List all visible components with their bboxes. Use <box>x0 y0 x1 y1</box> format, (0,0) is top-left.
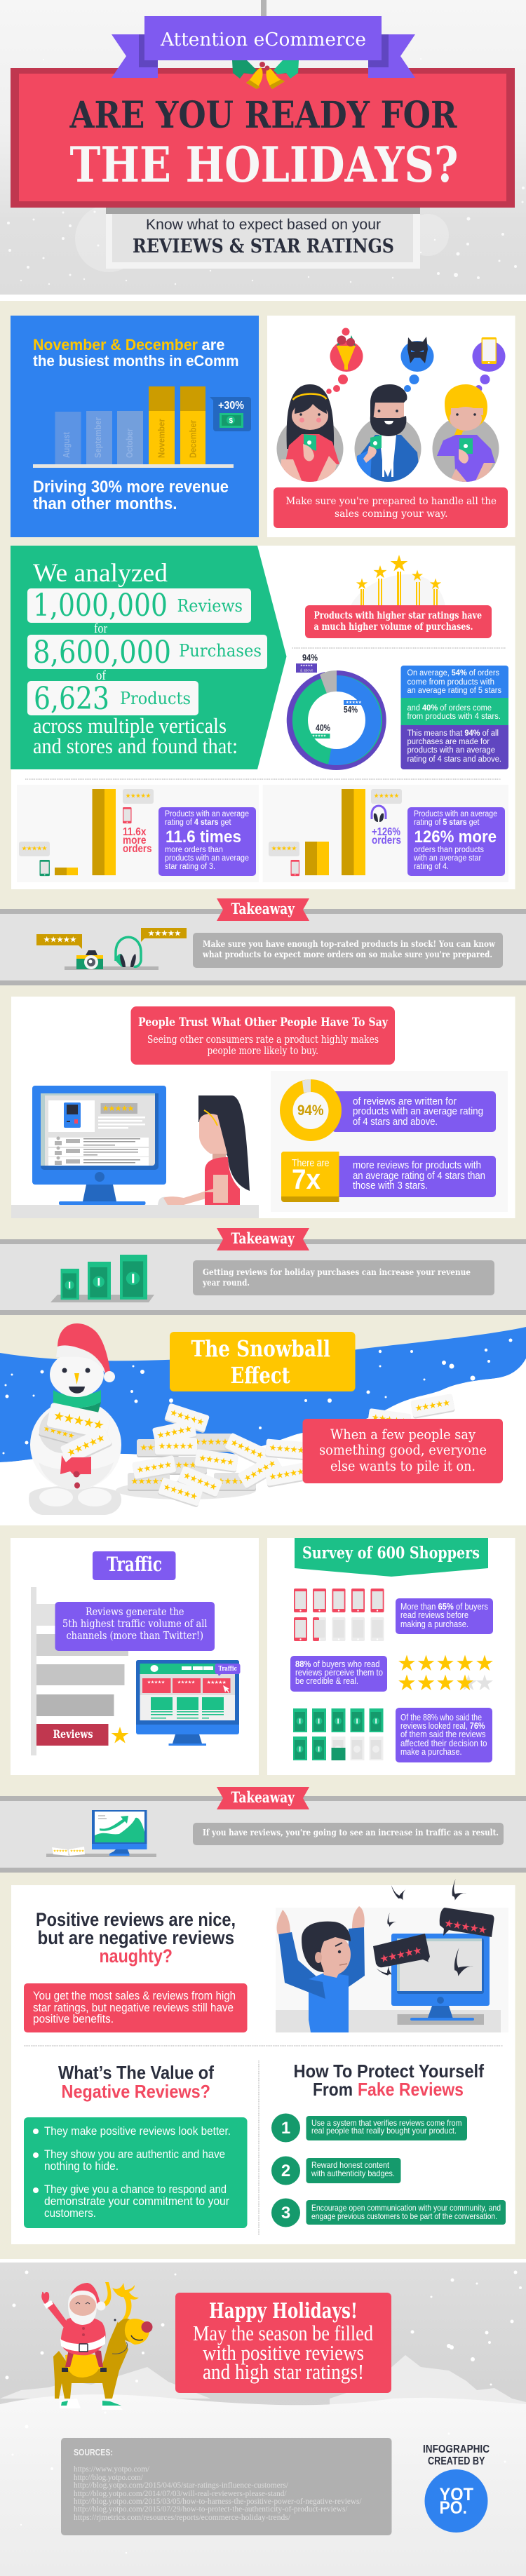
green arrow panel: 8,600,000 <box>33 635 171 670</box>
green arrow panel: 6,623 <box>34 681 109 717</box>
icon: money 76% <box>293 1708 383 1760</box>
illustration: blonde woman <box>432 384 499 484</box>
text: 65%: making a purchase. <box>400 1619 468 1629</box>
heading <box>33 336 238 370</box>
bar chart: September <box>93 417 103 458</box>
title panel <box>11 68 515 208</box>
chart: 11.6x more orders: star rating of 3. <box>165 863 215 871</box>
callout: positive benefits: positive benefits. <box>33 2012 114 2025</box>
bar chart: traffic channels <box>31 1587 128 1755</box>
sources box: http://blog.yotpo.com/2015/04/05/star-ratings-influence-customers/ <box>74 2480 289 2490</box>
chart: +126% orders: orders than products <box>414 846 484 854</box>
stat: 7x: those with 3 stars. <box>353 1180 428 1192</box>
stat: 7x: 7x <box>292 1164 321 1195</box>
block: value of negative reviews: They show you are authentic and have <box>44 2147 225 2161</box>
callout: higher volume <box>305 605 492 638</box>
donut legend text: and 40% of orders come <box>407 704 492 713</box>
chart: 11.6x more orders: more orders than <box>165 846 223 854</box>
ribbon: Attention eCommerce <box>112 16 415 78</box>
heading: survey of 600 shoppers <box>295 1538 488 1577</box>
donut legend text: purchases are made for <box>407 738 490 746</box>
greeting box: with positive reviews <box>203 2340 364 2365</box>
donut chart: 54% <box>344 704 358 715</box>
sources box: http://blog.yotpo.com/ <box>74 2472 144 2482</box>
text: takeaway message: year round. <box>202 1277 250 1288</box>
donut legend text: rating of 4 stars and above. <box>407 755 501 764</box>
step 1: real people that really bought your product. <box>311 2126 457 2136</box>
bats <box>377 1879 478 1981</box>
callout: positive benefits: You get the most sales & reviews from high <box>33 1989 236 2002</box>
panel: busiest months <box>11 316 259 537</box>
ribbon: takeaway: Takeaway <box>231 900 295 917</box>
text: 65%: read reviews before <box>400 1610 468 1620</box>
block: protect from fake reviews: From <box>313 2079 353 2100</box>
step 3: 3 <box>281 2204 290 2223</box>
text: 88%: be credible & real. <box>295 1676 358 1686</box>
illustration: man with bad reviews <box>276 1879 508 2032</box>
callout: pile it on: else wants to pile it on. <box>330 1457 476 1474</box>
stat: 94% <box>280 1079 496 1141</box>
takeaway band 1 <box>0 898 526 985</box>
panel: negative reviews <box>11 1879 515 2244</box>
callout: be prepared <box>274 487 508 528</box>
heading: are <box>202 336 224 353</box>
illustration: snowman <box>29 1323 121 1515</box>
panel: analysis <box>11 546 515 889</box>
stat: 7x: an average rating of 4 stars than <box>353 1170 485 1182</box>
heading: naughty: naughty? <box>100 1946 173 1967</box>
block: protect from fake reviews: Fake Reviews <box>358 2079 464 2100</box>
icon: phones 65% <box>294 1589 384 1641</box>
donut legend text: an average rating of 5 stars <box>407 687 501 695</box>
chart: 11.6x more orders: Products with an average <box>165 810 249 818</box>
block: protect from fake reviews <box>271 2061 506 2227</box>
heading: traffic <box>93 1551 175 1580</box>
credit: Yotpo logo: INFOGRAPHIC <box>423 2443 490 2455</box>
panel: survey <box>267 1538 515 1775</box>
callout: higher volume: Products with higher star ratings have <box>314 610 482 621</box>
sources box: http://blog.yotpo.com/2014/07/03/will-real-reviewers-please-stand/ <box>74 2488 287 2498</box>
chart: 11.6x more orders: orders <box>123 843 151 855</box>
text: 65% <box>396 1598 493 1634</box>
bar chart <box>33 386 234 468</box>
donut chart: 94% <box>302 652 318 663</box>
bar chart: October <box>124 429 135 458</box>
thought: bouquet <box>326 328 363 394</box>
ribbon: takeaway: Takeaway <box>231 1229 295 1247</box>
hanging rope <box>261 0 267 17</box>
stats panel <box>271 1071 508 1212</box>
heading: the snowball effect: Effect <box>230 1362 290 1389</box>
step 3 <box>271 2198 506 2227</box>
panel: traffic <box>11 1538 259 1775</box>
icon: monitor with traffic <box>136 1660 240 1746</box>
icon: monitor with rising graph <box>46 1810 156 1857</box>
thought: phone <box>469 337 505 394</box>
green arrow panel: Purchases <box>179 641 262 661</box>
block: protect from fake reviews: How To Protect Yourself <box>293 2061 484 2082</box>
donut legend text: come from products with <box>407 678 494 687</box>
callout: positive benefits: star ratings, but negative reviews still have <box>33 2001 234 2014</box>
illustration: bearded man <box>355 384 421 484</box>
credit: Yotpo logo: CREATED BY <box>428 2455 485 2467</box>
chart: 11.6x more orders: more <box>123 835 147 847</box>
chart: +126% orders: with an average star <box>413 854 481 863</box>
donut legend text: products with an average <box>407 746 495 755</box>
chart: 11.6x more orders: 11.6x <box>123 826 147 838</box>
bar chart: August <box>61 431 72 458</box>
text: driving revenue: than other months. <box>33 494 177 513</box>
step 2: 2 <box>281 2162 290 2180</box>
step 3: Encourage open communication with your community, and <box>311 2203 501 2213</box>
chart: +126% orders: Products with an average <box>414 810 497 818</box>
green arrow panel: and stores and found that: <box>33 734 238 758</box>
heading: naughty <box>36 1909 236 1967</box>
donut chart <box>287 652 386 770</box>
heading: the snowball effect <box>170 1332 355 1391</box>
heading: the busiest months in eComm <box>33 352 238 370</box>
callout: pile it on: When a few people say <box>330 1426 476 1443</box>
callout: higher volume: a much higher volume of purchases. <box>314 621 473 633</box>
chart: +126% orders: rating of 4. <box>414 863 449 871</box>
callout: 5th highest traffic: 5th highest traffic volume of all <box>62 1619 208 1630</box>
callout: positive benefits <box>24 1983 247 2032</box>
heading box: Seeing other consumers rate a product highly makes <box>147 1034 379 1046</box>
chart: 11.6x more orders: rating of 4 stars get <box>165 818 231 827</box>
chart: +126% orders: 126% more <box>414 828 497 847</box>
icon: rising stars <box>351 555 445 606</box>
ribbon: Attention eCommerce: Attention eCommerce <box>160 29 366 50</box>
donut chart: & above <box>300 669 313 673</box>
chart: +126% orders <box>262 785 508 882</box>
heading: the snowball effect: The Snowball <box>191 1335 330 1362</box>
credit: Yotpo logo: PO. <box>439 2498 467 2518</box>
subtitle box <box>106 208 420 269</box>
sources box <box>61 2438 391 2535</box>
heading: naughty: Positive reviews are nice, <box>36 1909 236 1930</box>
green arrow panel: 1,000,000 <box>33 588 168 623</box>
callout: +30% <box>210 397 251 431</box>
footer section <box>0 2259 526 2576</box>
heading box: people more likely to buy. <box>208 1046 318 1057</box>
heading: naughty: but are negative reviews <box>38 1927 234 1948</box>
greeting box: May the season be filled <box>193 2321 373 2345</box>
illustration: woman at computer <box>11 1086 259 1218</box>
bubble: negative ratings right <box>440 1908 494 1937</box>
stat: 94%: of reviews are written for <box>353 1095 457 1107</box>
illustration: woman with dark hair <box>276 384 344 485</box>
ribbon: takeaway: Takeaway <box>231 1788 295 1806</box>
stat: 7x <box>281 1152 496 1202</box>
panel: shoppers <box>267 316 515 537</box>
chart: +126% orders: +126% <box>372 826 400 838</box>
text: 76% <box>396 1708 492 1762</box>
takeaway band 2 <box>0 1228 526 1315</box>
block: value of negative reviews: customers. <box>44 2206 96 2220</box>
ribbon: takeaway <box>217 1787 309 1809</box>
step 2: Reward honest content <box>311 2160 390 2170</box>
ribbon: takeaway <box>217 898 309 921</box>
block: value of negative reviews <box>24 2062 247 2228</box>
chart: +126% orders: rating of 5 stars get <box>414 818 480 827</box>
text: 76%: of them said the reviews <box>400 1729 485 1739</box>
text: 65%: More than 65% of buyers <box>400 1602 488 1612</box>
step 3: engage previous customers to be part of the conversation. <box>311 2211 497 2221</box>
bubble: negative ratings left <box>373 1934 430 1967</box>
heading: traffic: Traffic <box>107 1553 162 1576</box>
title panel: ARE YOU READY FOR <box>69 94 457 137</box>
block: value of negative reviews: nothing to hide. <box>44 2159 119 2173</box>
sources box: http://blog.yotpo.com/2015/07/29/how-to-protect-the-authenticity-of-product-reviews/ <box>74 2504 348 2514</box>
text: takeaway message: Getting reviews for holiday purchases can increase your revenue <box>203 1267 471 1277</box>
icon: stars 88% <box>398 1655 493 1690</box>
callout: +30%: $ <box>229 417 233 425</box>
donut legend text <box>401 666 508 769</box>
text: 88%: 88% of buyers who read <box>295 1659 380 1669</box>
callout: pile it on: something good, everyone <box>319 1441 487 1458</box>
step 1: 1 <box>281 2119 290 2138</box>
callout: pile it on <box>303 1419 503 1483</box>
credit: Yotpo logo <box>423 2443 490 2533</box>
step 2: with authenticity badges. <box>311 2169 395 2178</box>
subtitle box: REVIEWS & STAR RATINGS <box>133 236 394 257</box>
stat: 94%: of 4 stars and above. <box>353 1116 438 1128</box>
block: value of negative reviews: What’s The Value of <box>58 2062 214 2083</box>
greeting box: Happy Holidays! <box>209 2299 358 2324</box>
green arrow panel: across multiple verticals <box>33 713 227 738</box>
illustration: pile of review cards <box>116 1394 455 1508</box>
donut legend text: This means that 94% of all <box>407 729 499 738</box>
callout: be prepared: Make sure you're prepared to handle all the <box>286 496 497 507</box>
sources box: http://blog.yotpo.com/2015/03/05/how-to-harness-the-positive-power-of-negative-reviews/ <box>74 2496 362 2506</box>
greeting box <box>175 2293 391 2393</box>
donut legend text: On average, 54% of orders <box>407 669 499 677</box>
icon: camera and headphones with ratings <box>36 928 187 970</box>
callout: 5th highest traffic <box>55 1602 215 1651</box>
ribbon: takeaway <box>217 1228 309 1250</box>
block: value of negative reviews: demonstrate your commitment to your <box>44 2194 229 2208</box>
thought: mask <box>398 337 433 394</box>
green arrow panel: for <box>94 621 108 636</box>
icon: growing money stacks <box>50 1255 154 1302</box>
callout: 5th highest traffic: Reviews generate the <box>86 1607 184 1618</box>
heading: survey of 600 shoppers: Survey of 600 Shoppers <box>302 1544 480 1563</box>
bar chart: November <box>156 419 167 458</box>
text: driving revenue <box>33 478 229 513</box>
chart: 11.6x more orders <box>17 785 259 882</box>
takeaway band 3 <box>0 1787 526 1873</box>
bar chart: December <box>188 420 198 458</box>
stat: 7x: There are <box>292 1157 330 1169</box>
callout: +30%: +30% <box>218 400 244 412</box>
illustration: santa on reindeer <box>41 2282 152 2410</box>
heading: November & December <box>33 336 198 353</box>
bar chart: traffic channels: Reviews <box>53 1727 93 1741</box>
section: snowball effect <box>0 1323 526 1525</box>
donut chart: 40% <box>316 722 330 733</box>
green arrow panel: of <box>96 668 107 683</box>
chart: 11.6x more orders: 11.6 times <box>166 828 241 847</box>
greeting box: and high star ratings! <box>203 2359 364 2384</box>
green arrow panel: Reviews <box>177 596 243 616</box>
text: takeaway message <box>193 933 503 968</box>
heading box <box>130 1006 395 1065</box>
callout: 5th highest traffic: channels (more than Twitter!) <box>66 1631 203 1642</box>
block: value of negative reviews: Negative Reviews? <box>62 2081 210 2102</box>
block: value of negative reviews: They give you a chance to respond and <box>44 2183 227 2196</box>
step 1 <box>271 2114 467 2142</box>
step 1: Use a system that verifies reviews come from <box>311 2118 461 2128</box>
stat: 94%: 94% <box>297 1102 324 1119</box>
heading box: People Trust What Other People Have To Say <box>138 1016 388 1029</box>
text: takeaway message <box>193 1823 504 1845</box>
step 2 <box>271 2156 401 2185</box>
text: 76%: Of the 88% who said the <box>400 1713 482 1722</box>
text: driving revenue: Driving 30% more revenue <box>33 478 229 497</box>
text: 88%: reviews perceive them to <box>295 1668 383 1678</box>
text: 76%: affected their decision to <box>400 1739 487 1748</box>
header section <box>0 0 526 301</box>
sources box: SOURCES: <box>74 2447 113 2457</box>
text: 88% <box>290 1656 387 1692</box>
text: 76%: make a purchase. <box>400 1747 461 1757</box>
text: takeaway message <box>193 1260 494 1295</box>
green arrow panel: We analyzed <box>33 559 168 588</box>
stat: 7x: more reviews for products with <box>353 1159 481 1171</box>
chart: 11.6x more orders: products with an average <box>165 854 249 863</box>
title panel: THE HOLIDAYS? <box>70 137 459 194</box>
subtitle box: Know what to expect based on your <box>146 217 381 233</box>
icon: monitor with traffic: Traffic <box>219 1665 237 1673</box>
block: value of negative reviews: They make positive reviews look better. <box>44 2124 231 2138</box>
chart: +126% orders: orders <box>372 835 401 847</box>
stat: 94%: products with an average rating <box>353 1105 483 1117</box>
callout: be prepared: sales coming your way. <box>335 508 447 520</box>
sources box: https://www.yotpo.com/ <box>74 2464 150 2474</box>
green arrow panel <box>11 546 286 769</box>
sources box: https://rjmetrics.com/resources/reports/ecommerce-holiday-trends/ <box>74 2512 291 2522</box>
donut legend text: from products with 4 stars. <box>407 713 501 721</box>
green arrow panel: Products <box>120 689 191 708</box>
icon: holly and bells <box>232 60 299 89</box>
text: 76%: reviews looked real, 76% <box>400 1721 485 1731</box>
panel: people trust <box>11 997 515 1218</box>
credit: Yotpo logo: YOT <box>439 2485 473 2504</box>
